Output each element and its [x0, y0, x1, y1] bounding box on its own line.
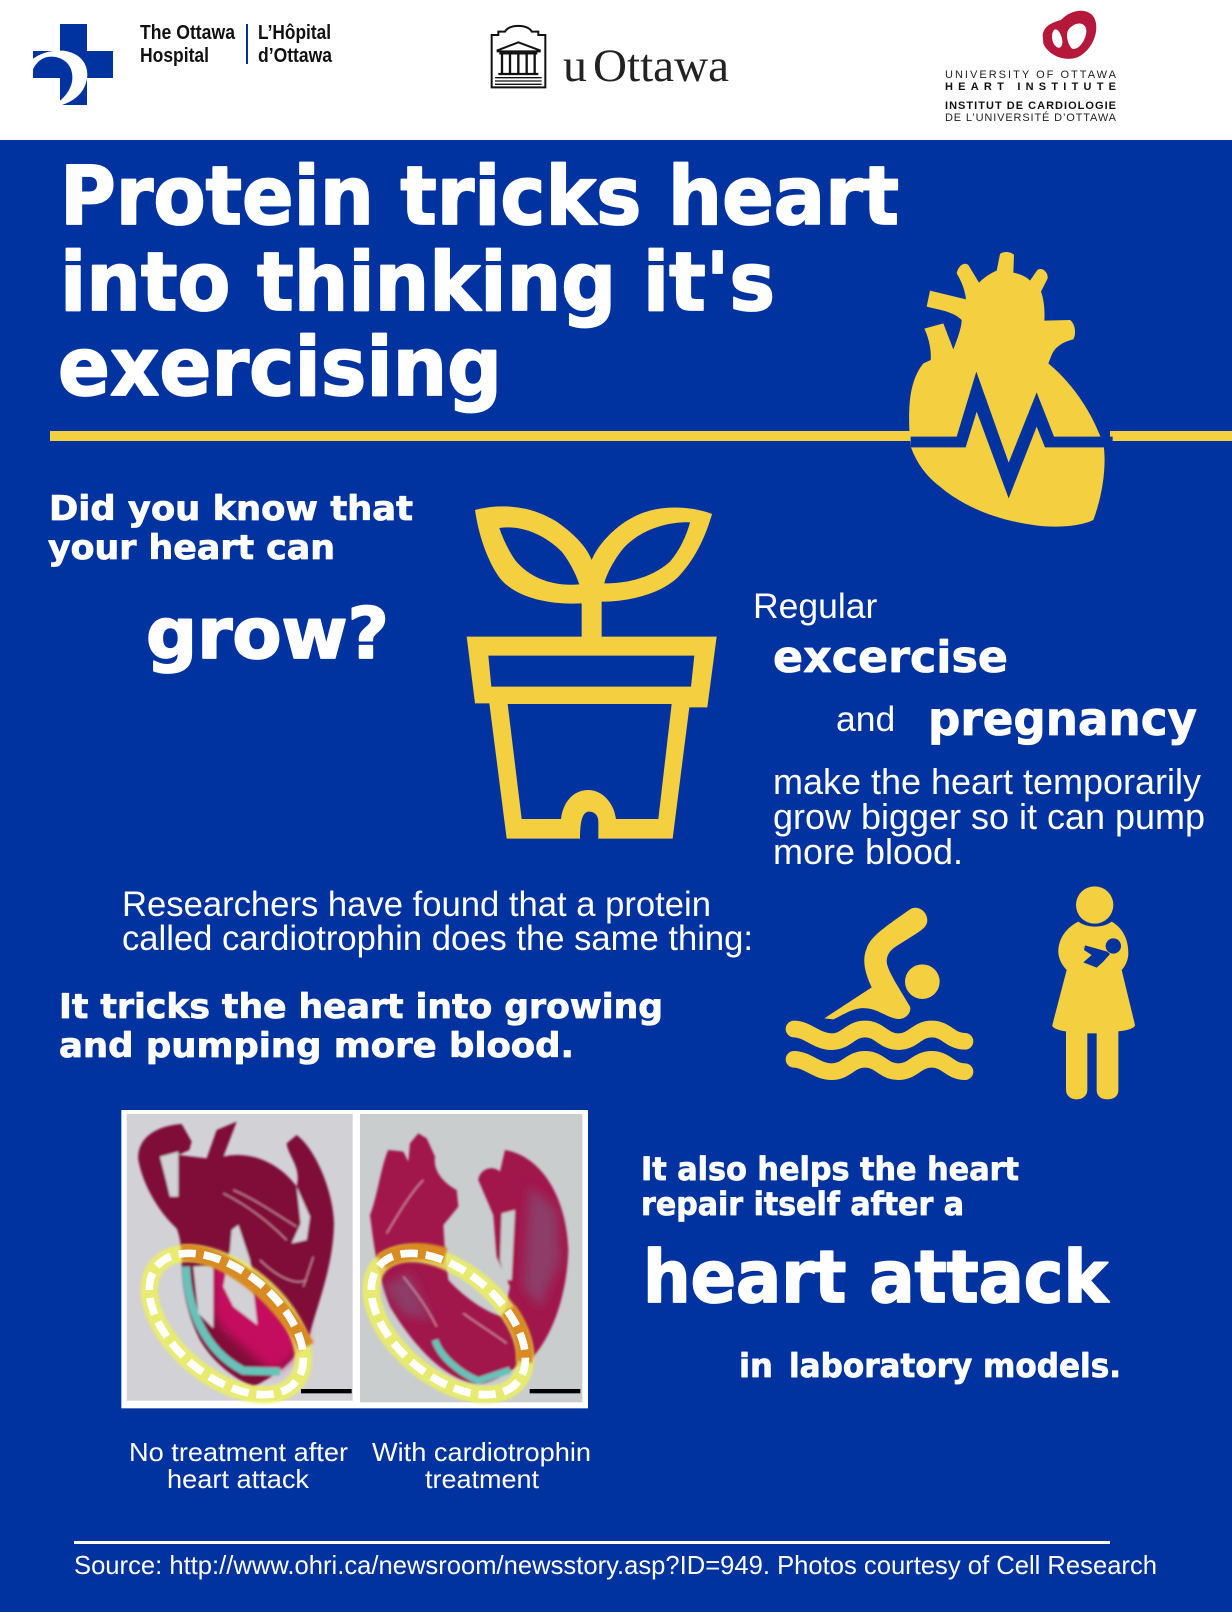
text: regular exercise and pregnancy: pregnancy — [928, 692, 1197, 746]
caption: with cardiotrophin: treatment — [425, 1464, 540, 1494]
text: heart grows temporarily: grow bigger so it can pump — [773, 796, 1205, 837]
logo: University of Ottawa Heart Institute: INSTITUT DE CARDIOLOGIE — [945, 100, 1116, 112]
title: Protein tricks heart — [60, 150, 899, 244]
logo: The Ottawa Hospital: L’Hôpital — [258, 22, 331, 44]
text: in laboratory models: in — [739, 1346, 773, 1385]
intro question: your heart can — [48, 528, 335, 568]
logo: University of Ottawa Heart Institute: UNIVERSITY OF OTTAWA — [945, 69, 1117, 81]
source rule — [74, 1541, 1110, 1544]
text: heart grows temporarily — [773, 761, 1205, 872]
text: researchers finding: called cardiotrophin does the same thing: — [122, 919, 753, 958]
logo: The Ottawa Hospital: The Ottawa — [140, 22, 236, 44]
text: regular exercise and pregnancy — [753, 586, 1197, 746]
logo: The Ottawa Hospital: d’Ottawa — [258, 45, 333, 67]
text: in laboratory models: laboratory models. — [789, 1346, 1121, 1385]
photo: scale bars — [301, 1389, 580, 1393]
title: exercising — [58, 321, 502, 415]
text: heart grows temporarily: more blood. — [773, 831, 963, 872]
caption: no treatment — [129, 1437, 348, 1494]
icon: mother holding baby — [1052, 886, 1135, 1099]
source note: Source: http://www.ohri.ca/newsroom/newsstory.asp?ID=949. Photos courtesy of Cell Research — [74, 1550, 1157, 1580]
title: into thinking it's — [60, 236, 775, 330]
text: regular exercise and pregnancy: and — [836, 699, 895, 739]
intro question: Did you know that — [49, 489, 413, 529]
text: tricks the heart — [59, 987, 663, 1066]
title — [58, 150, 899, 415]
logo: The Ottawa Hospital — [32, 22, 333, 106]
logo: uOttawa — [492, 26, 729, 92]
caption: with cardiotrophin: With cardiotrophin — [372, 1437, 591, 1467]
icon: heart with pulse — [909, 252, 1113, 527]
title rule — [50, 431, 1232, 441]
text: tricks the heart: and pumping more blood. — [59, 1026, 574, 1066]
photo: heart sections comparison — [121, 1110, 588, 1422]
text: heart repair: It also helps the heart — [641, 1150, 1019, 1188]
text: regular exercise and pregnancy: excercise — [773, 632, 1008, 683]
photo: highlight ellipses — [123, 1226, 551, 1422]
text: heart repair — [641, 1150, 1019, 1223]
caption: no treatment: No treatment after — [129, 1437, 348, 1467]
header logo strip — [0, 0, 1232, 140]
text: researchers finding: Researchers have found that a protein — [122, 885, 711, 924]
icon: swimmer — [794, 908, 965, 1072]
text: researchers finding — [122, 885, 753, 958]
text: regular exercise and pregnancy: Regular — [753, 586, 877, 626]
photo: treated heart tissue — [370, 1133, 568, 1384]
caption: with cardiotrophin — [372, 1437, 591, 1494]
text: tricks the heart: It tricks the heart into growing — [59, 987, 663, 1027]
logo: uOttawa: u — [563, 40, 587, 92]
icon: potted plant — [467, 506, 717, 839]
logo: University of Ottawa Heart Institute — [945, 11, 1117, 124]
logo: The Ottawa Hospital: Hospital — [140, 45, 209, 67]
word: heart attack: heart attack — [643, 1235, 1110, 1319]
logo: University of Ottawa Heart Institute: DE L’UNIVERSITÉ D’OTTAWA — [945, 111, 1117, 124]
logo: uOttawa: Ottawa — [593, 40, 729, 92]
logo: University of Ottawa Heart Institute: HEART INSTITUTE — [945, 81, 1116, 93]
photo: untreated heart tissue — [138, 1122, 334, 1387]
intro question — [48, 489, 413, 568]
text: heart grows temporarily: make the heart temporarily — [773, 761, 1201, 802]
caption: no treatment: heart attack — [167, 1464, 310, 1494]
text: heart repair: repair itself after a — [641, 1185, 964, 1223]
word: grow: grow? — [146, 593, 389, 675]
